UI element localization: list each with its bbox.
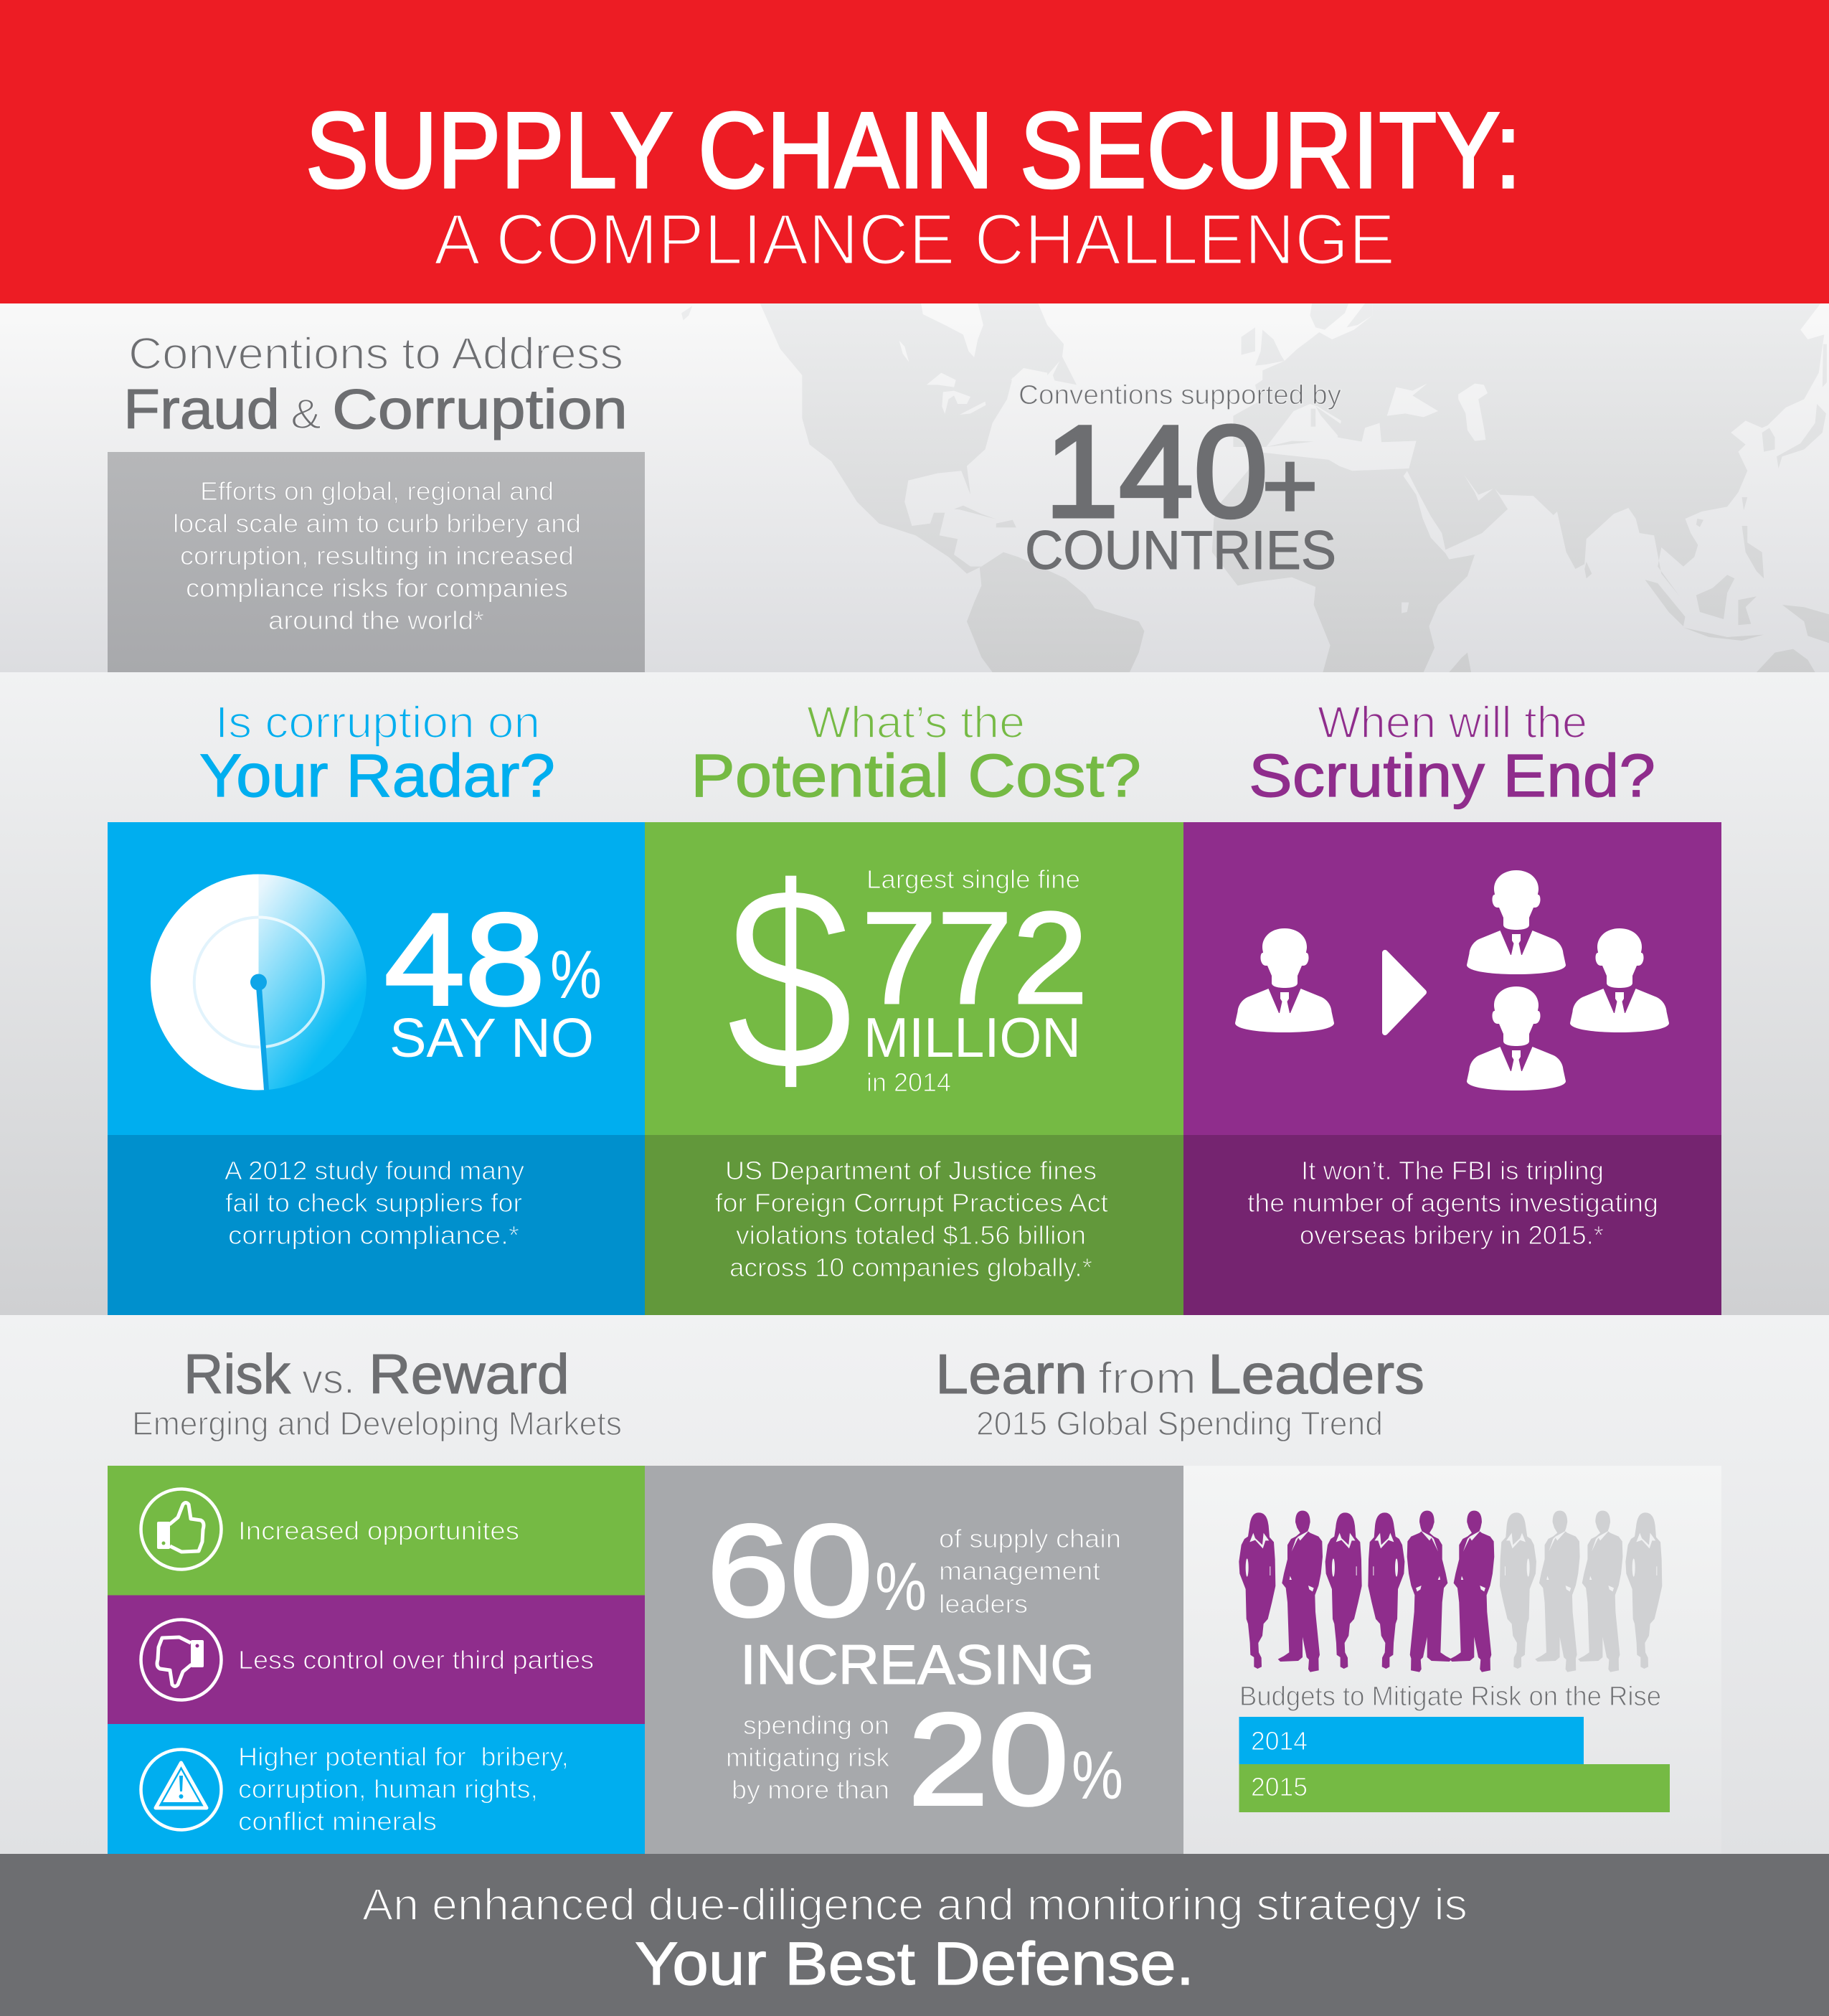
icon: grey leaders silhouettes: [1500, 1511, 1662, 1672]
stat: 60% of leaders: leaders: [939, 1589, 1028, 1619]
chart title: Budgets to Mitigate Risk on the Rise: [1239, 1682, 1661, 1712]
heading: risk vs reward: Emerging and Developing Markets: [132, 1405, 622, 1442]
bar chart: 2015: [1251, 1772, 1308, 1801]
heading: conventions to address: &: [290, 391, 321, 438]
panel: intro text box: around the world*: [268, 606, 484, 635]
stat: 48% say no: SAY NO: [389, 1007, 594, 1069]
icon: warning triangle: [141, 1749, 221, 1829]
stat: 772 million: [861, 865, 1088, 1097]
stat: 140+ countries: +: [1262, 431, 1318, 540]
bar chart: 2014: [1251, 1726, 1308, 1756]
panel: conventions section: [0, 303, 1829, 672]
stat: 772 million: in 2014: [866, 1068, 951, 1097]
panel: purple scrutiny: [1183, 822, 1721, 1315]
text: DOJ fines: US Department of Justice fines: [725, 1156, 1097, 1185]
heading: risk vs reward: vs.: [302, 1356, 355, 1403]
heading: risk vs reward: [132, 1342, 622, 1442]
panel: opportunities row: [108, 1466, 645, 1596]
text: increasing: INCREASING: [740, 1633, 1095, 1696]
text: higher potential: conflict minerals: [238, 1807, 437, 1836]
stat: 60% of leaders: %: [875, 1549, 927, 1625]
heading: conventions to address: Fraud: [123, 377, 280, 441]
panel: intro text box: compliance risks for companies: [186, 573, 568, 603]
footer headline: Your Best Defense.: [635, 1930, 1194, 1997]
text: higher potential: [238, 1742, 569, 1836]
bar chart: [1239, 1717, 1670, 1812]
text: less control: Less control over third parties: [238, 1645, 594, 1674]
stat: more than 20%: 20: [908, 1686, 1069, 1832]
panel: budgets chart: [1183, 1466, 1721, 1854]
text: higher potential: corruption, human rights,: [238, 1774, 538, 1804]
heading: scrutiny end: When will the: [1318, 698, 1587, 748]
stat: 60% of leaders: of supply chain: [939, 1524, 1121, 1553]
text: higher potential: Higher potential for bribery,: [238, 1742, 569, 1771]
subtitle: A COMPLIANCE CHALLENGE: [434, 199, 1395, 280]
stat: 772 million: Largest single fine: [866, 865, 1080, 894]
panel: risk and leaders section: [0, 1315, 1829, 1854]
stat: 48% say no: 48: [384, 886, 545, 1032]
world map: [681, 303, 1829, 672]
text: FBI tripling: overseas bribery in 2015.*: [1300, 1220, 1604, 1250]
heading: potential cost: Potential Cost?: [691, 742, 1141, 809]
stat: 48% say no: %: [550, 937, 602, 1013]
heading: learn from leaders: [935, 1342, 1424, 1442]
stat: 140+ countries: [1019, 380, 1341, 581]
icon: three agents: [1467, 870, 1669, 1091]
heading: risk vs reward: Risk: [184, 1342, 291, 1405]
footer text: An enhanced due-diligence and monitoring strategy is: [362, 1880, 1468, 1930]
heading: scrutiny end: Scrutiny End?: [1249, 742, 1655, 809]
icon: thumbs up: [141, 1489, 221, 1570]
text: increased opportunities: Increased opportunites: [238, 1516, 519, 1545]
text: DOJ fines: [715, 1156, 1108, 1282]
panel: three question columns: [0, 672, 1829, 1315]
text: DOJ fines: for Foreign Corrupt Practices Act: [715, 1188, 1108, 1217]
text: FBI tripling: It won’t. The FBI is tripling: [1301, 1156, 1604, 1185]
text: FBI tripling: [1247, 1156, 1658, 1250]
icon: thumbs down: [141, 1620, 221, 1700]
heading: conventions to address: Corruption: [332, 377, 628, 441]
heading: risk vs reward: Reward: [369, 1342, 570, 1405]
heading: potential cost: What’s the: [807, 698, 1025, 748]
panel: green 772 million: [645, 822, 1183, 1315]
stat: more than 20%: %: [1072, 1738, 1123, 1814]
heading: learn from leaders: from: [1098, 1354, 1196, 1403]
panel: grey stats: [645, 1466, 1183, 1854]
stat: more than 20%: [726, 1686, 1123, 1832]
heading: your radar: Is corruption on: [215, 698, 540, 748]
stat: 140+ countries: COUNTRIES: [1025, 520, 1336, 581]
panel: potential row: [108, 1724, 645, 1854]
heading: your radar: Your Radar?: [199, 742, 555, 809]
panel: control row: [108, 1596, 645, 1725]
panel: intro text box: local scale aim to curb bribery and: [173, 509, 581, 538]
footer banner: [0, 1854, 1829, 2016]
stat: 140+ countries: Conventions supported by: [1019, 380, 1341, 410]
heading: potential cost: [691, 698, 1141, 809]
heading: scrutiny end: [1249, 698, 1655, 809]
panel: blue 48 percent: [108, 822, 645, 1315]
stat: more than 20%: mitigating risk: [726, 1743, 890, 1772]
stat: 60% of leaders: management: [939, 1556, 1100, 1586]
header banner: [0, 0, 1829, 303]
text: study finding: [225, 1156, 524, 1250]
title: SUPPLY CHAIN SECURITY:: [306, 90, 1521, 210]
panel: intro text box: Efforts on global, regional and: [200, 476, 554, 506]
heading: conventions to address: Conventions to Address: [128, 329, 623, 379]
icon: purple leaders silhouettes: [1239, 1511, 1494, 1672]
heading: conventions to address: [123, 329, 628, 441]
icon: dollar sign: $: [725, 831, 854, 1127]
panel: intro text box: corruption, resulting in increased: [180, 541, 574, 570]
heading: learn from leaders: 2015 Global Spending Trend: [976, 1405, 1383, 1442]
stat: 60% of leaders: 60: [706, 1497, 873, 1644]
heading: your radar: [199, 698, 555, 809]
stat: 140+ countries: 140: [1044, 398, 1268, 545]
text: study finding: fail to check suppliers for: [225, 1188, 522, 1217]
text: study finding: A 2012 study found many: [225, 1156, 524, 1185]
gauge chart: [151, 874, 367, 1091]
panel: intro text box: [108, 452, 645, 672]
stat: 772 million: 772: [861, 885, 1088, 1031]
stat: more than 20%: spending on: [743, 1710, 889, 1740]
heading: learn from leaders: Learn: [935, 1342, 1087, 1405]
text: study finding: corruption compliance.*: [228, 1220, 519, 1250]
text: FBI tripling: the number of agents investigating: [1247, 1188, 1658, 1217]
stat: 48% say no: [384, 886, 602, 1069]
stat: 60% of leaders: [706, 1497, 1121, 1644]
arrow: [1385, 953, 1424, 1032]
text: DOJ fines: across 10 companies globally.*: [729, 1253, 1092, 1282]
icon: one agent: [1235, 928, 1334, 1032]
text: DOJ fines: violations totaled $1.56 billion: [736, 1220, 1086, 1250]
stat: more than 20%: by more than: [732, 1775, 889, 1804]
heading: learn from leaders: Leaders: [1208, 1342, 1424, 1405]
stat: 772 million: MILLION: [864, 1006, 1081, 1069]
